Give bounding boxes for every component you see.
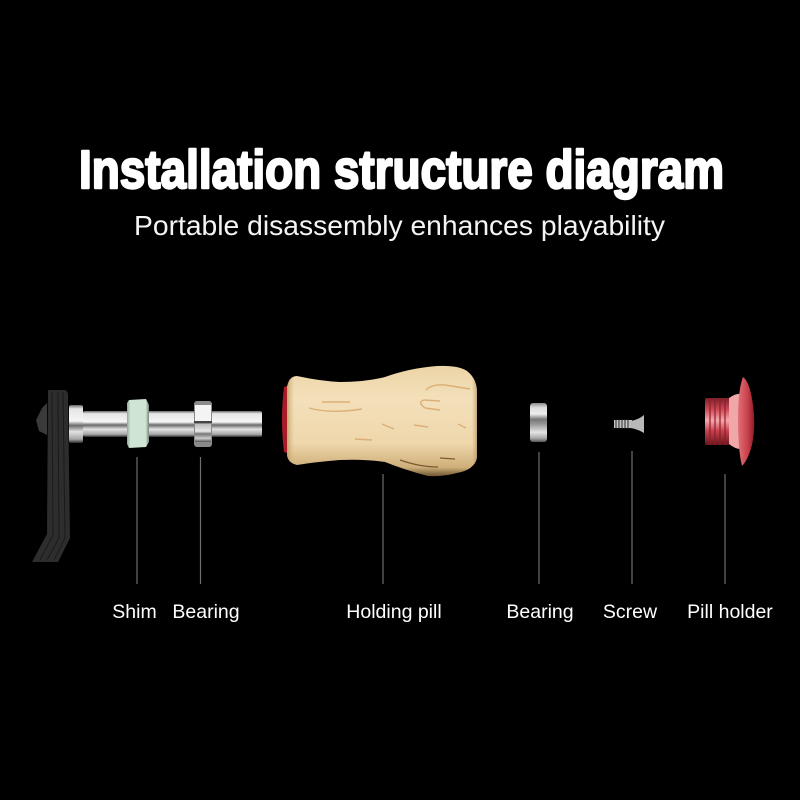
- threaded stem: [705, 398, 730, 445]
- subtitle: Portable disassembly enhances playability: [134, 210, 665, 241]
- shaft collar: [69, 405, 83, 443]
- thread lines: [710, 398, 725, 445]
- part: second bearing: [530, 403, 547, 442]
- label: screw: Screw: [603, 601, 658, 623]
- cork edge shading: [287, 366, 477, 476]
- part: screw: [614, 415, 644, 433]
- handle arm: [32, 390, 70, 562]
- label: holding pill: Holding pill: [346, 601, 442, 623]
- handle texture: [40, 392, 65, 560]
- leader lines: [137, 451, 725, 584]
- screw thread: [614, 420, 632, 428]
- bearing part: [194, 401, 212, 447]
- part: holding pill: [282, 366, 477, 476]
- label: shim: Shim: [112, 601, 157, 623]
- handle screw head: [36, 403, 47, 435]
- shim part: [127, 399, 149, 448]
- shaft: [83, 411, 262, 437]
- dome neck: [729, 394, 741, 449]
- cork grain marks: [309, 385, 470, 440]
- cork grip: [287, 366, 477, 476]
- cork bottom creases: [400, 458, 455, 467]
- label: bearing 2: Bearing: [506, 601, 574, 623]
- label: pill holder: Pill holder: [687, 601, 773, 623]
- red end ring: [282, 386, 287, 453]
- part: handle arm with shaft: [32, 390, 262, 562]
- part: pill holder: [705, 377, 754, 466]
- flange: [738, 377, 754, 466]
- screw head: [630, 415, 644, 433]
- label: bearing: Bearing: [172, 601, 240, 623]
- part labels: [112, 601, 773, 623]
